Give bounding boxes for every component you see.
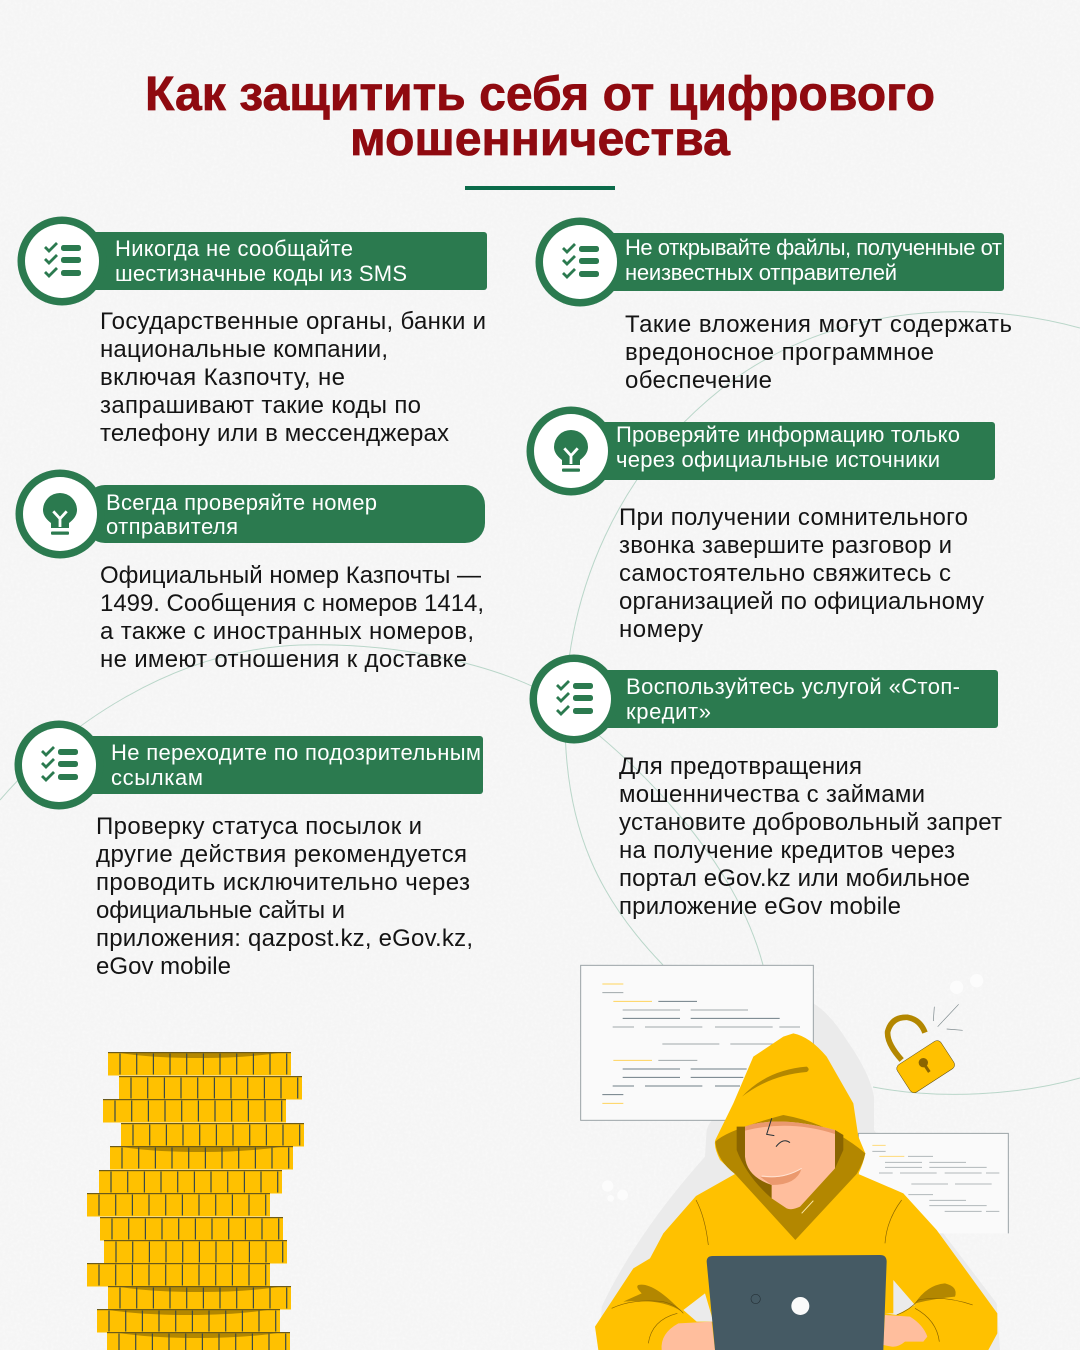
code window: large	[581, 965, 813, 1120]
hood fold	[742, 1067, 809, 1097]
heading	[625, 235, 1002, 285]
body text: на получение кредитов через	[619, 837, 955, 864]
hoodie	[595, 1033, 997, 1350]
heading	[616, 422, 960, 472]
heading: Проверяйте информацию только	[616, 422, 960, 447]
header bar	[590, 422, 995, 480]
heading: Не открывайте файлы, полученные от	[625, 235, 1002, 260]
heading	[626, 674, 960, 724]
icon: checklist	[14, 720, 104, 810]
icon: open padlock	[888, 1004, 963, 1095]
heading: Воспользуйтесь услугой «Стоп-	[626, 674, 960, 699]
body text	[96, 813, 473, 980]
sleeve folds	[623, 1283, 956, 1312]
body text: приложение eGov mobile	[619, 893, 901, 920]
panel: stop credit	[530, 654, 1002, 920]
body text	[100, 308, 486, 447]
body text: приложения: qazpost.kz, eGov.kz,	[96, 925, 473, 952]
body text: звонка завершите разговор и	[619, 532, 952, 559]
title: Как защитить себя от цифрового	[145, 68, 935, 121]
body text: самостоятельно свяжитесь с	[619, 560, 951, 587]
body text: вредоносное программное	[625, 339, 934, 366]
icon: checklist	[18, 216, 106, 306]
hood interior	[715, 1115, 865, 1240]
code window: small	[858, 1133, 1008, 1233]
body text	[100, 562, 484, 673]
heading	[106, 490, 377, 539]
title underline	[465, 186, 615, 190]
heading: ссылкам	[111, 765, 203, 790]
body text: включая Казпочту, не	[100, 364, 345, 391]
body text: проводить исключительно через	[96, 869, 470, 896]
heading: Всегда проверяйте номер	[106, 490, 377, 515]
body text: телефону или в мессенджерах	[100, 420, 449, 447]
heading: отправителя	[106, 514, 238, 539]
body text: официальные сайты и	[96, 897, 345, 924]
panel: unknown files	[536, 218, 1012, 394]
illustration: hacker with laptop	[581, 965, 1008, 1350]
background blob	[600, 1003, 1000, 1350]
heading: кредит»	[626, 699, 711, 724]
heading: Не переходите по подозрительным	[111, 740, 481, 765]
body text: организацией по официальному	[619, 588, 984, 615]
body text: Проверку статуса посылок и	[96, 813, 422, 840]
body text: При получении сомнительного	[619, 504, 968, 531]
body text: а также с иностранных номеров,	[100, 618, 474, 645]
heading	[115, 236, 407, 286]
white dots	[602, 974, 983, 1202]
body text: Для предотвращения	[619, 753, 862, 780]
header bar	[85, 736, 483, 794]
body text	[619, 504, 984, 643]
body text: национальные компании,	[100, 336, 388, 363]
title	[145, 68, 935, 166]
body text: запрашивают такие коды по	[100, 392, 421, 419]
body text: Такие вложения могут содержать	[625, 311, 1012, 338]
body text: eGov mobile	[96, 953, 231, 980]
arm gaps	[683, 1280, 915, 1322]
icon: light bulb	[526, 406, 616, 496]
icon: checklist	[536, 218, 624, 306]
heading	[111, 740, 481, 790]
body text: 1499. Сообщения с номеров 1414,	[100, 590, 484, 617]
body text	[625, 311, 1012, 394]
body text	[619, 753, 1002, 920]
panel: check sender number	[16, 470, 485, 673]
heading: шестизначные коды из SMS	[115, 261, 407, 286]
heading: через официальные источники	[616, 447, 940, 472]
body text: портал eGov.kz или мобильное	[619, 865, 970, 892]
panel: official sources	[526, 406, 995, 643]
laptop	[707, 1255, 887, 1350]
header bar	[85, 485, 485, 543]
body text: другие действия рекомендуется	[96, 841, 467, 868]
icon: light bulb	[16, 470, 104, 558]
header bar	[595, 670, 998, 728]
body text: номеру	[619, 616, 703, 643]
illustration: stack of coins	[87, 1052, 304, 1350]
header bar	[600, 233, 1004, 291]
panel: suspicious links	[14, 720, 483, 980]
panel: never share SMS codes	[18, 216, 487, 447]
icon: checklist	[530, 654, 618, 744]
title: мошенничества	[350, 113, 730, 166]
body text: обеспечение	[625, 367, 772, 394]
body text: мошенничества с займами	[619, 781, 925, 808]
face	[745, 1118, 835, 1213]
body text: Официальный номер Казпочты —	[100, 562, 481, 589]
heading: неизвестных отправителей	[625, 260, 897, 285]
hands	[662, 1322, 715, 1350]
heading: Никогда не сообщайте	[115, 236, 353, 261]
body text: установите добровольный запрет	[619, 809, 1002, 836]
body text: не имеют отношения к доставке	[100, 646, 467, 673]
header bar	[85, 232, 487, 290]
body text: Государственные органы, банки и	[100, 308, 486, 335]
